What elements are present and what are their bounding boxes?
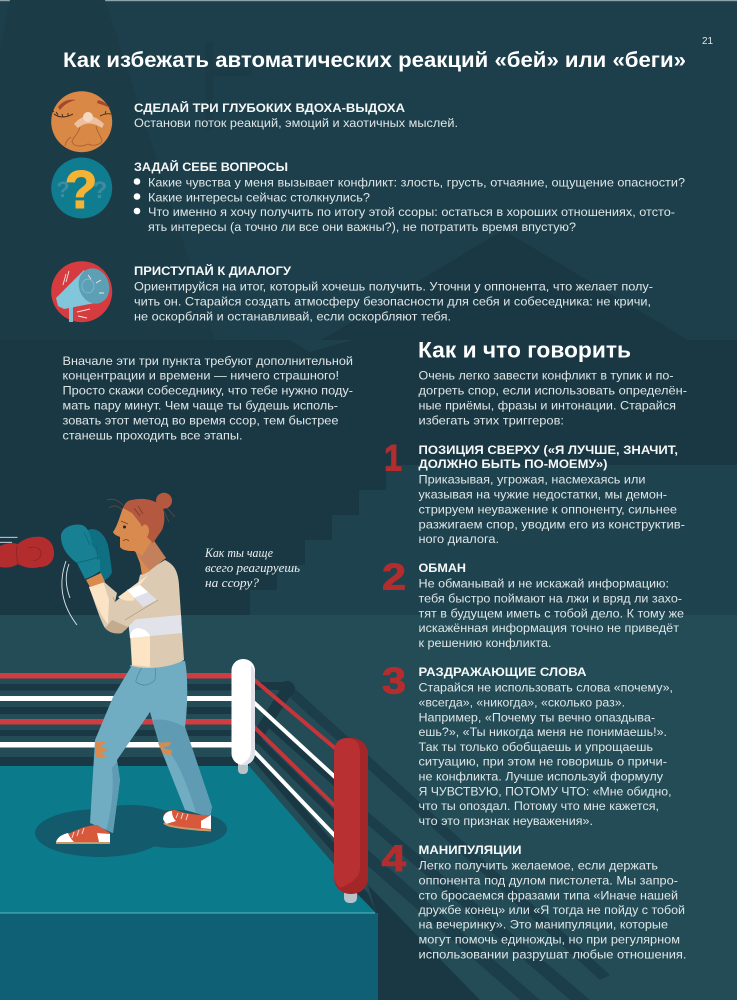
trigger 4: использовании разрушат любые отношения.: [418, 947, 686, 961]
trigger 4: дружбе конец» или «Я тогда не пойду с тобой: [418, 903, 685, 917]
red corner post: [334, 738, 368, 903]
trigger 1: ДОЛЖНО БЫТЬ ПО-МОЕМУ»): [418, 457, 608, 471]
trigger 4: могут помочь единожды, но при регулярном: [418, 933, 680, 947]
icon: question marks: ?: [93, 177, 107, 204]
torso sweater: [128, 560, 184, 668]
trigger 1: [384, 438, 685, 546]
step 3 text: чить он. Старайся создать атмосферу безопасности для себя и собеседника: не кричи,: [134, 294, 651, 308]
intro paragraph: ные приёмы, фразы и интонации. Старайся: [418, 398, 676, 412]
trigger 4: Легко получить желаемое, если держать: [418, 859, 658, 873]
step 3 text: не оскорбляй и останавливай, если оскорбляют тебя.: [134, 310, 451, 324]
icon: question marks: ?: [64, 160, 98, 220]
trigger 3: не конфликта. Лучше используй формулу: [418, 769, 664, 783]
white corner post: [232, 659, 255, 774]
back ropes: [0, 673, 249, 766]
icon: question marks: [51, 158, 112, 220]
trigger 4: МАНИПУЛЯЦИИ: [418, 843, 522, 857]
motion lines: [0, 537, 77, 625]
step 2 text: [134, 159, 685, 234]
trigger 1: 1: [384, 438, 402, 478]
front leg jeans: [90, 662, 170, 833]
front shoe: [56, 825, 110, 844]
left paragraph: Вначале эти три пункта требуют дополнительной: [62, 354, 353, 368]
trigger 3: Старайся не использовать слова «почему»,: [418, 681, 673, 695]
left paragraph: концентрации и времени — ничего страшного!: [62, 369, 339, 383]
trigger 2: искажённая информация точно не приведёт: [418, 621, 679, 635]
rope shadows: [250, 681, 376, 913]
left paragraph: станешь проходить все этапы.: [62, 428, 242, 442]
back leg jeans: [130, 661, 212, 817]
handwritten question: Как ты чаще: [204, 546, 273, 560]
trigger 4: 4: [382, 838, 407, 879]
step 3 text: Ориентируйся на итог, который хочешь получить. Уточни у оппонента, что желает полу-: [134, 280, 653, 294]
trigger 3: Так ты только обобщаешь и упрощаешь: [418, 740, 653, 754]
trigger 2: Не обманывай и не искажай информацию:: [418, 577, 669, 591]
raised boxing gloves: [61, 525, 112, 587]
step 2 text: Что именно я хочу получить по итогу этой ссоры: остаться в хороших отношениях, отсто-: [148, 205, 675, 219]
trigger 3: ешь?», «Ты никогда меня не понимаешь!».: [418, 725, 667, 739]
boxer figure: [0, 493, 227, 857]
step 1 text: СДЕЛАЙ ТРИ ГЛУБОКИХ ВДОХА-ВЫДОХА: [134, 100, 405, 115]
back shoe: [163, 810, 211, 830]
trigger 2: к решению конфликта.: [418, 636, 552, 650]
step 1 text: [134, 100, 458, 130]
floor shadow: [35, 805, 227, 857]
trigger 1: ПОЗИЦИЯ СВЕРХУ («Я ЛУЧШЕ, ЗНАЧИТ,: [418, 443, 678, 457]
neck and head: [107, 493, 175, 575]
step 2 text: Какие чувства у меня вызывает конфликт: злость, грусть, отчаяние, ощущение опасности?: [148, 176, 685, 190]
step 3 text: [134, 263, 653, 324]
title: Как избежать автоматических реакций «бей» или «беги»: [63, 49, 686, 72]
intro paragraph: [418, 368, 687, 428]
intro paragraph: догреть спор, если использовать определён-: [418, 384, 687, 398]
trigger 2: [382, 556, 684, 650]
trigger 3: что ты опоздал. Потому что мне кажется,: [418, 799, 659, 813]
arm sleeve: [89, 575, 158, 633]
left paragraph: Просто скажи собеседнику, что тебе нужно поду-: [62, 384, 353, 398]
icon: megaphone: [51, 261, 114, 322]
step 2 text: ять интересы (а точно ли все они важны?), не потратить время впустую?: [148, 220, 576, 234]
page number: 21: [702, 35, 713, 47]
right heading: Как и что говорить: [418, 338, 631, 362]
trigger 3: [382, 660, 673, 828]
trigger 3: Я ЧУВСТВУЮ, ПОТОМУ ЧТО: «Мне обидно,: [418, 784, 672, 798]
icon: face with bandage: [51, 91, 112, 152]
trigger 4: сто бросаемся фразами типа «Иначе нашей: [418, 888, 678, 902]
trigger 2: ОБМАН: [418, 561, 466, 575]
boxing ring floor: [0, 766, 378, 1000]
trigger 3: Например, «Почему ты вечно опаздыва-: [418, 710, 655, 724]
step 1 text: Останови поток реакций, эмоций и хаотичных мыслей.: [134, 116, 458, 130]
trigger 2: 2: [382, 556, 406, 598]
trigger 3: РАЗДРАЖАЮЩИЕ СЛОВА: [418, 665, 587, 679]
side ropes: [249, 676, 336, 837]
trigger 4: [382, 838, 686, 961]
left paragraph: [62, 354, 353, 442]
handwritten question: на ссору?: [205, 576, 260, 590]
intro paragraph: Очень легко завести конфликт в тупик и по-: [418, 368, 674, 382]
step 2 text: Какие интересы сейчас столкнулись?: [148, 190, 370, 204]
intro paragraph: избегать этих триггеров:: [418, 414, 564, 428]
trigger 1: разжигаем спор, уводим его из конструктив-: [418, 517, 685, 531]
trigger 2: тят в будущем иметь с тобой дело. К тому же: [418, 607, 684, 621]
left paragraph: зовать этот метод во время ссор, тем быстрее: [62, 414, 339, 428]
trigger 1: стрируем неуважение к оппоненту, сильнее: [418, 503, 677, 517]
step 3 text: ПРИСТУПАЙ К ДИАЛОГУ: [134, 263, 291, 278]
trigger 1: ного диалога.: [418, 532, 499, 546]
trigger 1: указывая на чужие недостатки, мы демон-: [418, 488, 667, 502]
trigger 1: Приказывая, угрожая, насмехаясь или: [418, 473, 646, 487]
left paragraph: мать пару минут. Чем чаще ты будешь исполь-: [62, 399, 338, 413]
icon: question marks: ?: [56, 177, 70, 202]
punching red glove: [0, 537, 54, 568]
trigger 4: на вечеринку». Это манипуляции, которые: [418, 918, 668, 932]
trigger 3: что это признак неуважения».: [418, 814, 593, 828]
trigger 3: ситуацию, при этом не говоришь о причи-: [418, 755, 667, 769]
step 2 text: ЗАДАЙ СЕБЕ ВОПРОСЫ: [134, 159, 288, 174]
trigger 3: «всегда», «никогда», «сколько раз».: [418, 695, 625, 709]
trigger 3: 3: [382, 660, 406, 702]
trigger 2: тебя быстро поймают на лжи и вряд ли захо-: [418, 592, 682, 606]
handwritten question: всего реагируешь: [205, 561, 300, 575]
trigger 4: оппонента под дулом пистолета. Мы запро-: [418, 873, 678, 887]
handwritten question: [204, 546, 300, 590]
